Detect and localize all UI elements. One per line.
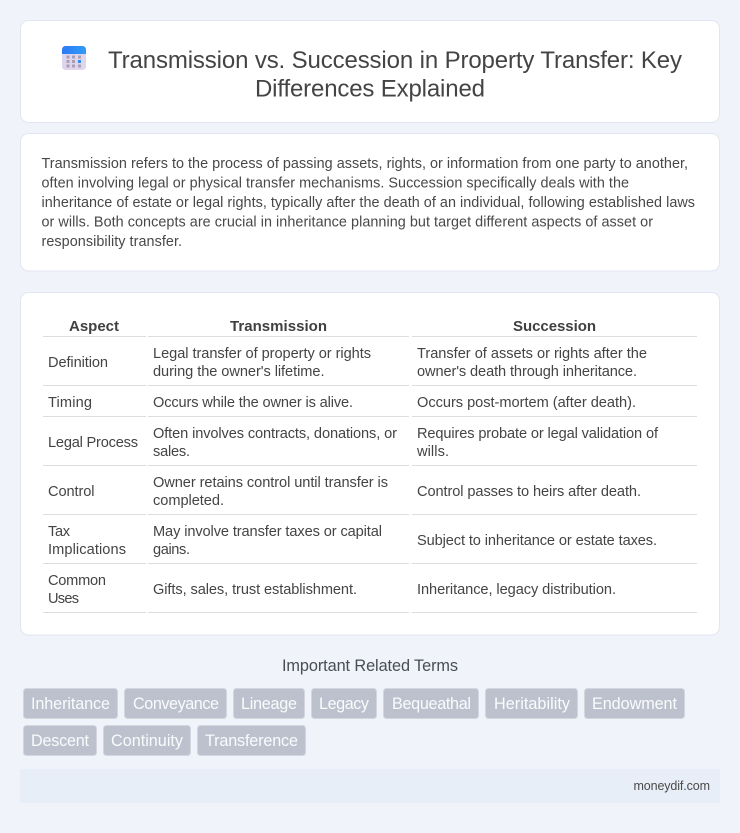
table row: Legal Process: wills. xyxy=(416,444,449,460)
table row: Timing xyxy=(43,395,697,417)
text block: introduction paragraph: often involving legal or physical transfer mechanisms. Succession specifically deals with the xyxy=(42,176,629,192)
tag: Legacy xyxy=(312,688,376,718)
text block: introduction paragraph: inheritance of estate or legal rights, typically after the death of an individual, following established laws xyxy=(42,195,695,211)
tag: Transference xyxy=(198,726,306,756)
panel: title card xyxy=(20,20,720,122)
tag: Transference: Transference xyxy=(205,732,298,750)
title xyxy=(108,47,682,102)
tag: Heritability xyxy=(486,688,578,718)
tag: Descent xyxy=(24,726,96,756)
tag: Heritability: Heritability xyxy=(494,695,571,713)
table row: Definition: Legal transfer of property or rights xyxy=(153,346,371,362)
table header: Transmission xyxy=(230,318,327,335)
table header: Aspect xyxy=(69,318,119,335)
table row: Common Uses: Uses xyxy=(48,591,79,607)
table row: Control: completed. xyxy=(153,493,224,509)
table row: Control: Control xyxy=(48,484,94,500)
tag: Legacy: Legacy xyxy=(319,695,370,713)
tag: Inheritance: Inheritance xyxy=(31,695,110,713)
table header xyxy=(43,318,697,337)
table row: Tax Implications xyxy=(43,524,697,564)
table row: Definition: owner's death through inheritance. xyxy=(417,364,637,380)
tag: Conveyance xyxy=(124,688,226,718)
title: Differences Explained xyxy=(255,76,485,102)
table row: Control: Control passes to heirs after death. xyxy=(417,484,641,500)
title: Transmission vs. Succession in Property Transfer: Key xyxy=(108,47,682,74)
tag: Lineage xyxy=(234,688,304,718)
footer bar: moneydif.com xyxy=(634,779,710,793)
text block: introduction paragraph xyxy=(42,156,695,250)
table row: Legal Process: Often involves contracts, donations, or xyxy=(153,426,397,442)
table row: Definition xyxy=(43,346,697,386)
text block: introduction paragraph: responsibility transfer. xyxy=(42,234,182,250)
tag: Lineage: Lineage xyxy=(241,695,297,713)
table row: Timing: Timing xyxy=(48,395,92,411)
footer bar xyxy=(20,769,720,803)
tag: Inheritance xyxy=(24,688,118,718)
panel: comparison table xyxy=(20,292,720,635)
table row: Common Uses xyxy=(43,573,697,613)
table row: Common Uses: Common xyxy=(48,573,106,589)
table row: Tax Implications: May involve transfer taxes or capital xyxy=(153,524,382,540)
table row: Control: Owner retains control until transfer is xyxy=(153,475,388,491)
heading: important related terms: Important Related Terms xyxy=(282,657,458,675)
text block: introduction paragraph: Transmission refers to the process of passing assets, rights, or information from one party to another, xyxy=(42,156,688,172)
table row: Tax Implications: Subject to inheritance or estate taxes. xyxy=(417,533,657,549)
tag: Continuity xyxy=(104,726,190,756)
tag: Descent: Descent xyxy=(31,732,90,750)
table row: Legal Process: Legal Process xyxy=(48,435,138,451)
table row: Control xyxy=(43,475,697,515)
table row: Definition: Transfer of assets or rights after the xyxy=(417,346,647,362)
table row: Common Uses: Gifts, sales, trust establishment. xyxy=(153,582,357,598)
text block: introduction paragraph: or wills. Both concepts are crucial in inheritance planning but target different aspects of asset or xyxy=(42,214,653,230)
tag: Endowment: Endowment xyxy=(592,695,678,713)
tag: Bequeathal: Bequeathal xyxy=(392,695,471,713)
table row: Tax Implications: Tax xyxy=(48,524,71,540)
table row: Tax Implications: gains. xyxy=(153,542,190,558)
tag: Conveyance: Conveyance xyxy=(133,695,219,713)
table row: Timing: Occurs post-mortem (after death). xyxy=(417,395,636,411)
table row: Legal Process: sales. xyxy=(153,444,190,460)
table header: Succession xyxy=(513,318,596,335)
table row: Tax Implications: Implications xyxy=(48,542,126,558)
icon: calendar xyxy=(62,46,86,70)
tag: Endowment xyxy=(584,688,684,718)
table row: Definition: Definition xyxy=(48,355,108,371)
table row: Legal Process: Requires probate or legal validation of xyxy=(417,426,659,442)
tag: Bequeathal xyxy=(384,688,478,718)
table row: Timing: Occurs while the owner is alive. xyxy=(153,395,353,411)
panel: related term tags xyxy=(24,688,684,756)
table row: Definition: during the owner's lifetime. xyxy=(153,364,324,380)
table row: Common Uses: Inheritance, legacy distribution. xyxy=(417,582,616,598)
tag: Continuity: Continuity xyxy=(111,732,184,750)
panel: introduction xyxy=(20,134,720,271)
table row: Legal Process xyxy=(43,426,697,466)
